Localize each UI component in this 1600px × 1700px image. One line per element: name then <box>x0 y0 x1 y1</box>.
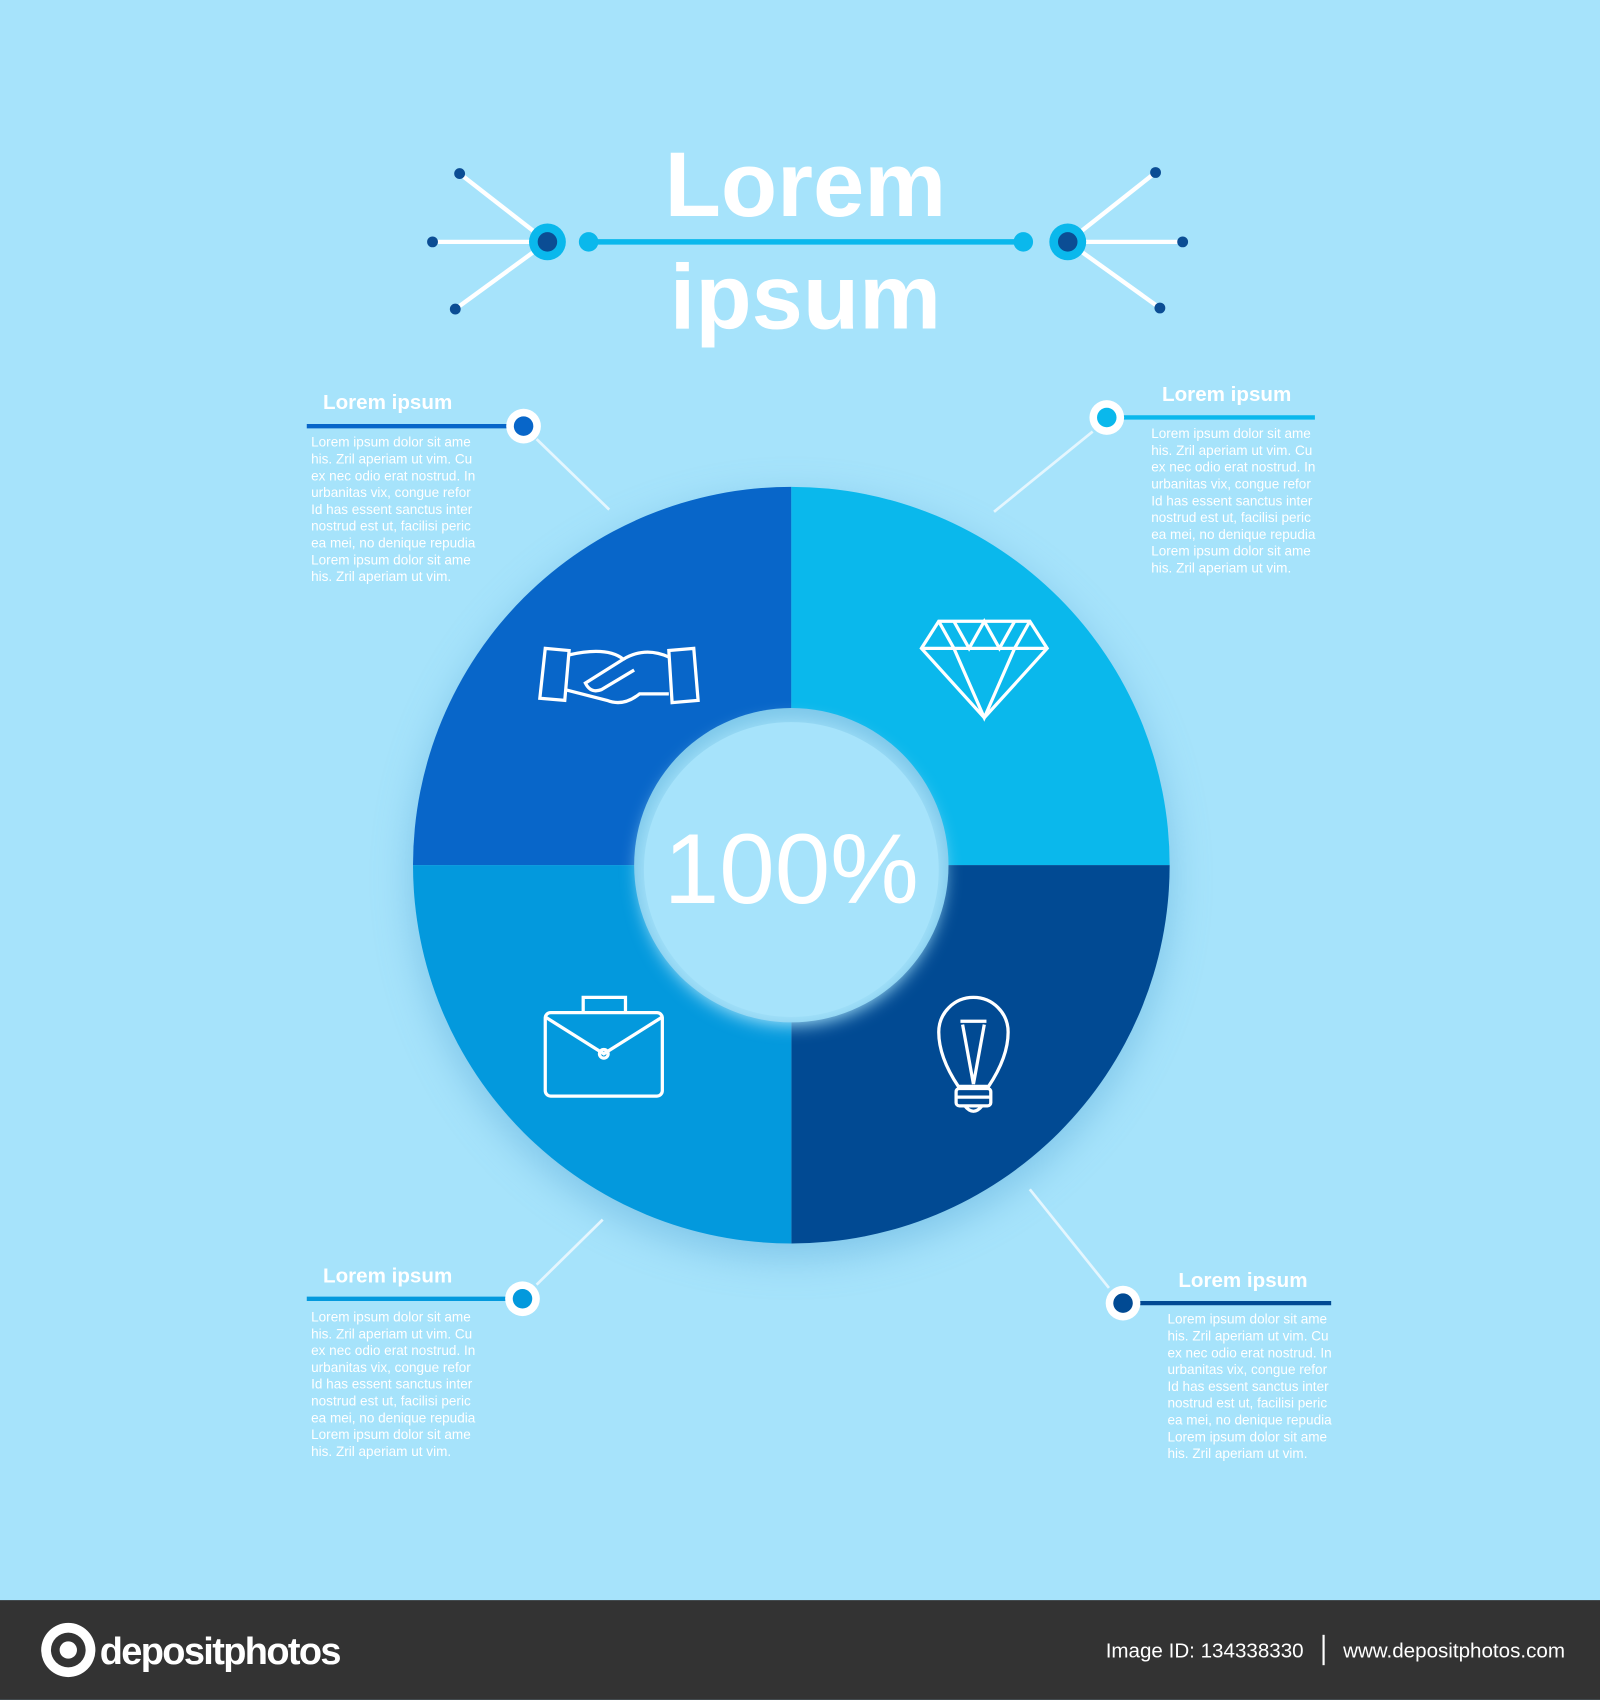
callout: bottom left: Lorem ipsum dolor sit ame <box>311 1427 471 1442</box>
callout: bottom right <box>1030 1189 1332 1461</box>
title decoration left <box>427 168 566 314</box>
callout: top left: ea mei, no denique repudia <box>311 536 476 551</box>
callout: top right: ea mei, no denique repudia <box>1151 527 1316 542</box>
footer bar: www.depositphotos.com <box>1342 1640 1565 1663</box>
callout: bottom left: Lorem ipsum dolor sit ame <box>311 1310 471 1325</box>
callout: top left: ex nec odio erat nostrud. In <box>311 468 475 483</box>
callout: top right: his. Zril aperiam ut vim. <box>1151 560 1291 575</box>
footer bar: Image ID: 134338330 <box>1106 1640 1304 1663</box>
callout: bottom left: Lorem ipsum <box>323 1265 452 1288</box>
callout: bottom left: his. Zril aperiam ut vim. Cu <box>311 1326 472 1341</box>
callout: bottom right: Lorem ipsum <box>1178 1269 1308 1292</box>
callout: bottom right: Lorem ipsum dolor sit ame <box>1167 1312 1327 1327</box>
callout: top right <box>994 383 1316 575</box>
callout: top right: Id has essent sanctus inter <box>1151 493 1313 508</box>
icon: briefcase <box>545 997 662 1096</box>
callout: top left: nostrud est ut, facilisi peric <box>311 519 471 534</box>
callout: bottom left <box>307 1220 603 1459</box>
callout: bottom right: ex nec odio erat nostrud. In <box>1167 1345 1332 1360</box>
callout: top left: Lorem ipsum dolor sit ame <box>311 435 471 450</box>
callout: bottom right: his. Zril aperiam ut vim. Cu <box>1167 1329 1329 1344</box>
callout: bottom right: urbanitas vix, congue refor <box>1167 1362 1328 1377</box>
callout: top right: his. Zril aperiam ut vim. Cu <box>1151 443 1312 458</box>
callout: bottom right: Lorem ipsum dolor sit ame <box>1167 1429 1327 1444</box>
callout: bottom right: Id has essent sanctus inter <box>1167 1379 1329 1394</box>
callout: bottom left: his. Zril aperiam ut vim. <box>311 1444 451 1459</box>
callout: top right: Lorem ipsum dolor sit ame <box>1151 544 1311 559</box>
callout: bottom left: ea mei, no denique repudia <box>311 1410 476 1425</box>
callout: top left: Id has essent sanctus inter <box>311 502 473 517</box>
footer bar <box>0 1600 1600 1700</box>
callout: bottom right: ea mei, no denique repudia <box>1167 1413 1332 1428</box>
icon: diamond <box>921 621 1047 718</box>
title: Lorem <box>665 133 946 236</box>
callout: top right: Lorem ipsum <box>1162 383 1291 406</box>
title decoration right <box>1049 167 1188 313</box>
callout: bottom right: nostrud est ut, facilisi peric <box>1167 1396 1327 1411</box>
callout: top right: nostrud est ut, facilisi peric <box>1151 510 1311 525</box>
callout: bottom right: his. Zril aperiam ut vim. <box>1167 1446 1307 1461</box>
callout: bottom left: Id has essent sanctus inter <box>311 1377 473 1392</box>
footer bar: depositphotos <box>100 1631 340 1673</box>
title <box>665 133 946 349</box>
callout: top right: Lorem ipsum dolor sit ame <box>1151 426 1311 441</box>
callout: top left: his. Zril aperiam ut vim. <box>311 569 451 584</box>
callout: bottom left: ex nec odio erat nostrud. In <box>311 1343 475 1358</box>
icon: handshake <box>540 648 698 703</box>
callout: top left: his. Zril aperiam ut vim. Cu <box>311 452 472 467</box>
title decoration center line <box>579 232 1033 252</box>
callout: top left: Lorem ipsum dolor sit ame <box>311 552 471 567</box>
title: ipsum <box>670 246 941 349</box>
callout: bottom left: urbanitas vix, congue refor <box>311 1360 471 1375</box>
icon: light bulb <box>939 997 1008 1111</box>
center label: 100% <box>664 814 919 925</box>
donut chart <box>412 487 1171 1258</box>
callout: bottom left: nostrud est ut, facilisi peric <box>311 1394 471 1409</box>
callout: top left <box>307 391 609 584</box>
callout: top left: Lorem ipsum <box>323 391 452 414</box>
callout: top right: ex nec odio erat nostrud. In <box>1151 460 1315 475</box>
callout: top right: urbanitas vix, congue refor <box>1151 476 1311 491</box>
callout: top left: urbanitas vix, congue refor <box>311 485 471 500</box>
